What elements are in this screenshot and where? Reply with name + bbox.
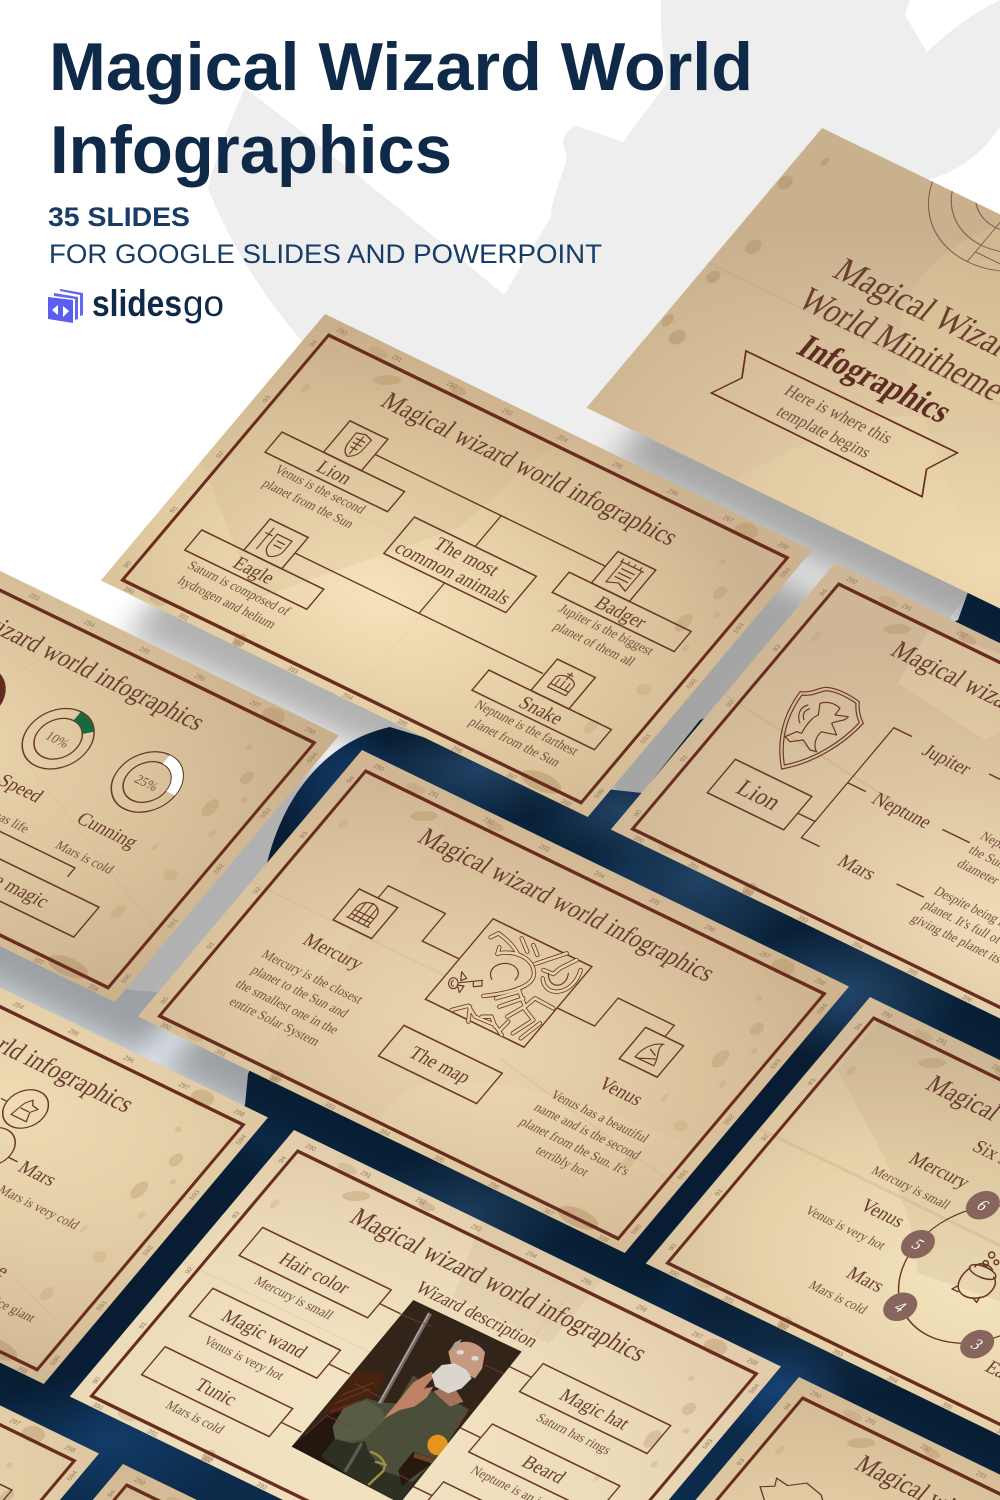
box: Hair color: Hair color (274, 1249, 355, 1299)
page numbers: 290 (132, 1477, 147, 1487)
page numbers: 396 (487, 1181, 501, 1191)
page numbers: 292 (414, 1196, 428, 1207)
node: Snake: Neptune is the farthest (471, 697, 582, 758)
item: Mars: Mars (841, 1263, 889, 1297)
page numbers: 93 (772, 644, 783, 653)
page numbers: 90 (123, 560, 134, 569)
page numbers: 295 (579, 1277, 594, 1287)
page numbers: 294 (11, 1001, 25, 1011)
page numbers: 295 (647, 897, 662, 907)
page numbers: 293 (469, 1223, 483, 1234)
page numbers: 90 (92, 1376, 103, 1385)
node: Eagle: Saturn is composed of (184, 558, 294, 618)
page numbers: 391 (213, 1048, 227, 1059)
panel: cauldron slide (645, 997, 1000, 1500)
page numbers: 91 (169, 505, 180, 514)
page numbers: 94 (782, 1402, 794, 1411)
circle node: Mars (0, 1121, 115, 1232)
item: Mercury: Mercury (904, 1149, 974, 1193)
box: Lion (707, 759, 812, 830)
box: Tunic (127, 1347, 293, 1454)
page numbers: 393 (796, 914, 810, 925)
page numbers: 593 (701, 1438, 715, 1450)
page numbers: 592 (213, 863, 226, 875)
page numbers: 590 (630, 1223, 644, 1236)
node: Venus: terribly hot (532, 1143, 593, 1179)
page numbers: 395 (432, 1154, 446, 1165)
heading: Infographics (789, 329, 960, 430)
page numbers: 394 (377, 1128, 392, 1138)
page numbers: 594 (816, 1003, 830, 1015)
box: Magic wand: Magic wand (216, 1306, 312, 1363)
item: Venus: Venus is very hot (802, 1203, 890, 1252)
node: Lion: Lion (311, 457, 357, 489)
label: Cunning: Mars is cold (52, 838, 118, 877)
page numbers: 291 (935, 1037, 949, 1047)
page numbers: 593 (259, 807, 273, 819)
number circles: 3 (966, 1334, 987, 1354)
small box (0, 1420, 12, 1500)
label: Cunning: Cunning (72, 809, 142, 853)
item: Mars (806, 1254, 891, 1317)
page numbers: 296 (121, 1055, 136, 1065)
item: Mercury (868, 1139, 974, 1212)
page numbers: 292 (482, 816, 496, 827)
circle node: Mars: Mars (13, 1157, 61, 1191)
page numbers: 294 (524, 1250, 538, 1260)
page numbers: 93 (262, 395, 273, 404)
background: grey wizard silhouette (208, 0, 1000, 900)
page numbers: 91 (679, 754, 690, 763)
page numbers: 297 (177, 1081, 191, 1092)
page numbers: 395 (940, 1401, 954, 1412)
panel: donut charts slide (0, 499, 339, 1003)
panel: bottom centre slide corner (0, 1464, 610, 1500)
page numbers: 93 (807, 1078, 818, 1087)
page numbers (0, 1417, 93, 1500)
page numbers: 290 (879, 1010, 894, 1020)
box: magic (0, 736, 99, 937)
donut: brown (0, 655, 20, 736)
page numbers: 392 (741, 888, 755, 898)
page numbers: 93 (736, 1458, 747, 1467)
connectors (364, 886, 675, 1053)
box: Tunic: Tunic (190, 1375, 241, 1410)
node: Venus: Venus (594, 1074, 648, 1110)
node: Lion: planet from the Sun (259, 476, 358, 531)
node: Venus: name and is the second (531, 1100, 645, 1162)
page numbers (617, 571, 1000, 1004)
page numbers: 297 (8, 1417, 22, 1428)
item: Mercury: Mercury is small (868, 1163, 954, 1212)
page numbers: 391 (145, 1428, 159, 1439)
box: Lion: Lion (730, 775, 787, 815)
label: Speed (0, 766, 57, 836)
page numbers: 293 (500, 407, 514, 418)
page numbers: 298 (63, 1444, 77, 1455)
page numbers: 397 (541, 1208, 556, 1218)
page numbers: 298 (303, 726, 317, 737)
page numbers: 397 (504, 772, 519, 782)
page numbers: 591 (639, 733, 653, 745)
page numbers: 398 (15, 1365, 29, 1375)
node: Lion: Venus is the second (271, 462, 369, 517)
item: Mars (822, 842, 1000, 995)
page numbers: 397 (31, 957, 46, 967)
page numbers: 91 (206, 941, 217, 950)
number circles: 5 (908, 1235, 928, 1254)
node: Mercury: the smallest one in the (232, 976, 342, 1037)
panel: left slide with circles (0, 881, 268, 1385)
page numbers: 93 (231, 1211, 242, 1220)
page numbers (107, 322, 806, 816)
page numbers: 295 (610, 461, 625, 471)
map frame (425, 919, 592, 1047)
page numbers: 298 (232, 1108, 246, 1119)
logo: slidesgo: go (183, 283, 224, 324)
number circles: 4 (890, 1297, 910, 1316)
node: Mercury: planet to the Sun and (248, 962, 353, 1020)
icon: lion shield (780, 687, 863, 769)
page numbers: 590 (49, 1354, 63, 1367)
page numbers: 394 (850, 941, 865, 951)
page numbers: 393 (323, 1101, 337, 1112)
page numbers: 291 (864, 1417, 878, 1427)
item: Mars: Mars is cold (806, 1278, 871, 1317)
page numbers: 90 (160, 996, 171, 1005)
page numbers: 393 (831, 1348, 845, 1359)
page numbers: 292 (919, 1443, 933, 1454)
item: Jupiter: Jupiter (917, 741, 976, 780)
page numbers: 392 (231, 639, 245, 649)
page numbers: 594 (66, 1470, 80, 1482)
page numbers: 296 (665, 488, 680, 498)
page numbers: 90 (633, 809, 644, 818)
box: Hair color (225, 1227, 391, 1335)
node: Venus: Venus has a beautiful (547, 1087, 653, 1145)
ribbon banner (710, 350, 958, 497)
page numbers: 296 (192, 673, 207, 683)
page numbers: 392 (776, 1322, 790, 1332)
page numbers: 298 (776, 541, 790, 552)
central box: common animals (390, 538, 515, 609)
page numbers: 592 (142, 1245, 155, 1257)
page numbers: 594 (306, 752, 320, 764)
page numbers: 297 (690, 1330, 704, 1341)
item: Neptune (855, 781, 1000, 929)
node: Mercury (220, 874, 428, 1052)
page numbers: 594 (779, 567, 793, 579)
banner text: template begins (772, 402, 876, 462)
box: Magic wand: Venus is very hot (201, 1333, 288, 1383)
page numbers: 398 (596, 1234, 610, 1244)
icon: cauldron (952, 1252, 999, 1302)
page numbers (0, 1001, 262, 1383)
page numbers: 396 (960, 994, 974, 1004)
panel: lion shield slide (610, 563, 1000, 1067)
logo: slidesgo: slides (92, 283, 182, 324)
photo: wizard holding staff (285, 1295, 530, 1500)
stains (650, 147, 835, 347)
title second line: Infographics (50, 112, 452, 188)
page numbers: 592 (686, 678, 699, 690)
connector tree (784, 719, 1000, 897)
page numbers (689, 1385, 988, 1500)
page numbers: 94 (308, 339, 320, 348)
page numbers: 91 (714, 1188, 725, 1197)
page numbers: 92 (215, 450, 226, 459)
item: Mars: Mars (833, 851, 880, 884)
page numbers: 298 (813, 977, 827, 988)
map illustration: streets and key (449, 933, 581, 1038)
page numbers: 93 (299, 831, 310, 840)
connectors (293, 454, 625, 674)
page numbers: 590 (120, 972, 134, 985)
node: Venus (504, 1011, 720, 1193)
central box: The most (429, 534, 504, 581)
page numbers: 291 (900, 603, 914, 613)
page numbers: 293 (537, 843, 551, 854)
donut: 10%: 10% (42, 728, 73, 751)
page numbers: 590 (593, 787, 607, 800)
background: navy blue shape (0, 592, 1000, 1500)
page numbers: 295 (137, 646, 152, 656)
page numbers: 390 (666, 1269, 681, 1279)
page numbers: 393 (255, 1481, 269, 1492)
page numbers: 94 (853, 1022, 865, 1031)
page numbers: 295 (66, 1028, 81, 1038)
node: Mercury: entire Solar System (226, 994, 324, 1049)
page numbers: 593 (769, 1058, 783, 1070)
page numbers: 592 (723, 1114, 736, 1126)
node: Badger: Badger (590, 593, 651, 633)
title: Magical Wizard World (49, 29, 753, 105)
donut: 25% (97, 741, 198, 823)
icon: continent outline (717, 1468, 864, 1500)
panel: common animals slide (100, 314, 812, 818)
page numbers: 391 (686, 861, 700, 872)
crease (708, 263, 1000, 511)
page numbers: 391 (176, 612, 190, 623)
ring (865, 1182, 1000, 1367)
background: pale blue wash (0, 930, 255, 1110)
item: Venus (802, 1178, 911, 1252)
box: Beard (455, 1424, 620, 1500)
icon: animal crest in circle (0, 1080, 58, 1135)
page numbers (652, 1005, 1000, 1438)
icon: crown (548, 668, 581, 696)
page numbers: 296 (702, 924, 717, 934)
icon: cage (346, 897, 385, 928)
slide title: Magical wizard world infographics (412, 823, 722, 987)
page numbers: 393 (286, 665, 300, 676)
page numbers: 594 (748, 1383, 762, 1395)
map label (378, 1025, 502, 1104)
page numbers: 290 (334, 327, 349, 337)
page numbers: 398 (559, 798, 573, 808)
number circles: 6 (973, 1196, 994, 1215)
logo: slidesgo (48, 283, 224, 324)
page numbers: 297 (758, 950, 772, 961)
page numbers: 298 (745, 1357, 759, 1368)
page numbers: 591 (676, 1169, 690, 1181)
central box (384, 517, 536, 613)
node: Badger: planet of them all (550, 619, 639, 669)
node: Lion (242, 401, 431, 539)
page numbers (76, 1138, 775, 1500)
icon: castle banner (604, 558, 646, 592)
node: Snake: planet from the Sun (466, 714, 564, 769)
globe lines (928, 181, 1000, 272)
panel: wizard description slide (69, 1130, 781, 1500)
node: Badger (529, 541, 718, 679)
box: lower right (420, 1482, 571, 1500)
page numbers: 290 (808, 1390, 823, 1400)
page numbers: 94 (277, 1155, 289, 1164)
page numbers: 593 (732, 622, 746, 634)
node: Eagle: Eagle (228, 553, 279, 588)
box: Magic wand (175, 1288, 340, 1395)
banner text (765, 381, 897, 465)
node: Venus: planet from the Sun. It's (516, 1114, 633, 1178)
node: Badger: Jupiter is the biggest (555, 601, 658, 658)
box: Hair color: Mercury is small (251, 1273, 337, 1322)
slide title: Magical wizard world infographics (375, 387, 685, 551)
panel: minitheme title slide (586, 128, 1000, 608)
item: Neptune: Neptune (867, 789, 936, 833)
page numbers: 292 (445, 380, 459, 391)
page numbers: 297 (721, 514, 735, 525)
box: Magic hat (505, 1364, 671, 1471)
item: Neptune (0, 1238, 61, 1325)
page numbers: 91 (138, 1321, 149, 1330)
node: Mercury: Mercury (298, 930, 368, 974)
page numbers: 92 (725, 699, 736, 708)
page numbers: 396 (450, 745, 464, 755)
heading (761, 247, 1000, 442)
page numbers: 92 (760, 1133, 771, 1142)
node: Eagle: hydrogen and helium (175, 573, 280, 632)
donut: 25%: 25% (131, 772, 162, 794)
page numbers: 294 (555, 434, 569, 444)
page numbers: 291 (427, 790, 441, 800)
page numbers: 296 (634, 1304, 649, 1314)
box: Magic hat: Magic hat (554, 1385, 634, 1434)
icon: sword and shield (252, 526, 295, 560)
page numbers (106, 1472, 202, 1500)
map label: The map (404, 1043, 475, 1088)
page numbers: 92 (184, 1266, 195, 1275)
subtitle: slide count: 35 SLIDES (48, 202, 190, 232)
photo heading: Wizard description (411, 1278, 543, 1352)
panel: map slide (137, 750, 849, 1254)
page numbers: 390 (158, 1022, 173, 1032)
page numbers: 390 (121, 586, 136, 596)
donut: 10% (8, 698, 109, 779)
page numbers: 391 (721, 1295, 735, 1306)
subtitle: platforms: FOR GOOGLE SLIDES AND POWERPOINT (49, 239, 602, 269)
connectors (280, 1304, 532, 1496)
page numbers: 593 (188, 1189, 202, 1201)
page numbers: 297 (248, 699, 262, 710)
page numbers: 294 (592, 870, 606, 880)
box: Beard: Beard (517, 1452, 570, 1488)
icon: wizard hat (635, 1038, 670, 1066)
number circles (852, 1175, 1000, 1375)
node: Snake: Snake (514, 693, 568, 729)
page numbers (0, 592, 333, 1001)
panel: bottom right map slide (574, 1377, 1000, 1500)
label: Cunning (52, 809, 142, 877)
page numbers: 90 (668, 1243, 679, 1252)
page numbers: 94 (106, 1489, 118, 1498)
panel: bottom left slide corner (0, 1217, 99, 1500)
page numbers: 94 (818, 588, 830, 597)
page numbers: 395 (905, 967, 919, 978)
icon: crest (340, 431, 373, 460)
page numbers: 392 (200, 1455, 214, 1465)
box: Magic hat: Saturn has rings (533, 1410, 615, 1457)
page numbers: 294 (82, 619, 96, 629)
page numbers: 293 (27, 592, 41, 603)
page numbers: 290 (303, 1143, 318, 1153)
page numbers: 591 (95, 1300, 109, 1312)
page numbers: 92 (252, 886, 263, 895)
page numbers: 94 (345, 775, 357, 784)
item: Venus: Venus (855, 1196, 909, 1232)
page numbers: 290 (844, 576, 859, 586)
box: Tunic: Mars is cold (163, 1397, 228, 1437)
background: blue highlights (0, 720, 1000, 1500)
page numbers (144, 758, 843, 1252)
page numbers: 390 (631, 835, 646, 845)
node: Snake (448, 639, 638, 778)
bracket connector (0, 758, 75, 877)
page numbers: 594 (235, 1134, 249, 1146)
node: Eagle (161, 499, 350, 638)
page numbers: 290 (371, 763, 386, 773)
page numbers: 394 (340, 692, 355, 702)
slide title: Magical wizard world infographics (344, 1203, 654, 1367)
page numbers: 293 (974, 1470, 988, 1481)
page numbers: 390 (90, 1402, 105, 1412)
banner text: Here is where this (780, 381, 897, 447)
page numbers: 398 (86, 983, 100, 993)
page numbers: 395 (395, 718, 409, 729)
page numbers: 291 (390, 354, 404, 364)
page numbers: 392 (268, 1075, 282, 1085)
page numbers: 591 (166, 918, 180, 930)
page numbers: 291 (359, 1170, 373, 1180)
page numbers: 394 (885, 1375, 900, 1385)
node: Mercury: Mercury is the closest (258, 947, 367, 1007)
page numbers: 292 (955, 629, 969, 640)
